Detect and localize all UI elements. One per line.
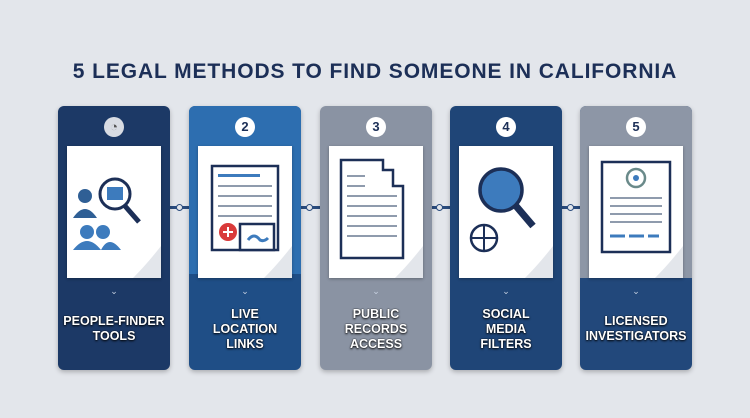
card 1: people-finder tools: TOOLS — [93, 329, 135, 343]
card 2: live location links: LOCATION — [213, 322, 277, 336]
icon: documents — [329, 146, 423, 278]
icon: certificate — [589, 146, 683, 278]
icon: document with map — [198, 146, 292, 278]
card 5: licensed investigators — [580, 106, 692, 370]
card 4: social media filters: SOCIAL — [482, 306, 530, 320]
card 4: social media filters: FILTERS — [480, 336, 532, 350]
card 3: public records access: ⌄ — [372, 286, 380, 296]
icon: magnifier and crosshair — [459, 146, 553, 278]
card 2: live location links: ⌄ — [241, 286, 249, 296]
card 3: public records access: RECORDS — [345, 322, 407, 336]
card 2: live location links: LINKS — [226, 336, 264, 350]
card 3: public records access: ACCESS — [350, 336, 402, 350]
card 5: licensed investigators: INVESTIGATORS — [586, 329, 686, 343]
card 1: people-finder tools: ⌄ — [110, 286, 118, 296]
icon: people with magnifier — [67, 146, 161, 278]
card 2: live location links: LIVE — [231, 306, 259, 320]
connector 3-4 — [428, 206, 452, 209]
card 2: live location links — [189, 106, 301, 370]
card 4: social media filters: ⌄ — [502, 286, 510, 296]
connector 4-5 — [560, 206, 584, 209]
card 1: people-finder tools — [58, 106, 170, 370]
card 2: live location links: 2 — [241, 119, 249, 134]
card 5: licensed investigators: LICENSED — [604, 314, 668, 328]
card 5: licensed investigators: 5 — [632, 119, 640, 134]
card 3: public records access — [320, 106, 432, 370]
card 3: public records access: 3 — [372, 119, 380, 134]
card 3: public records access: PUBLIC — [353, 306, 399, 320]
card 4: social media filters: 4 — [502, 119, 510, 134]
title: 5 LEGAL METHODS TO FIND SOMEONE IN CALIFORNIA — [73, 60, 677, 83]
card 5: licensed investigators: ⌄ — [632, 286, 640, 296]
card 1: people-finder tools: PEOPLE-FINDER — [63, 314, 165, 328]
card 4: social media filters: MEDIA — [486, 322, 526, 336]
card 1: people-finder tools: ◔ — [110, 119, 118, 134]
card 4: social media filters — [450, 106, 562, 370]
connector 1-2 — [168, 206, 192, 209]
connector 2-3 — [298, 206, 322, 209]
